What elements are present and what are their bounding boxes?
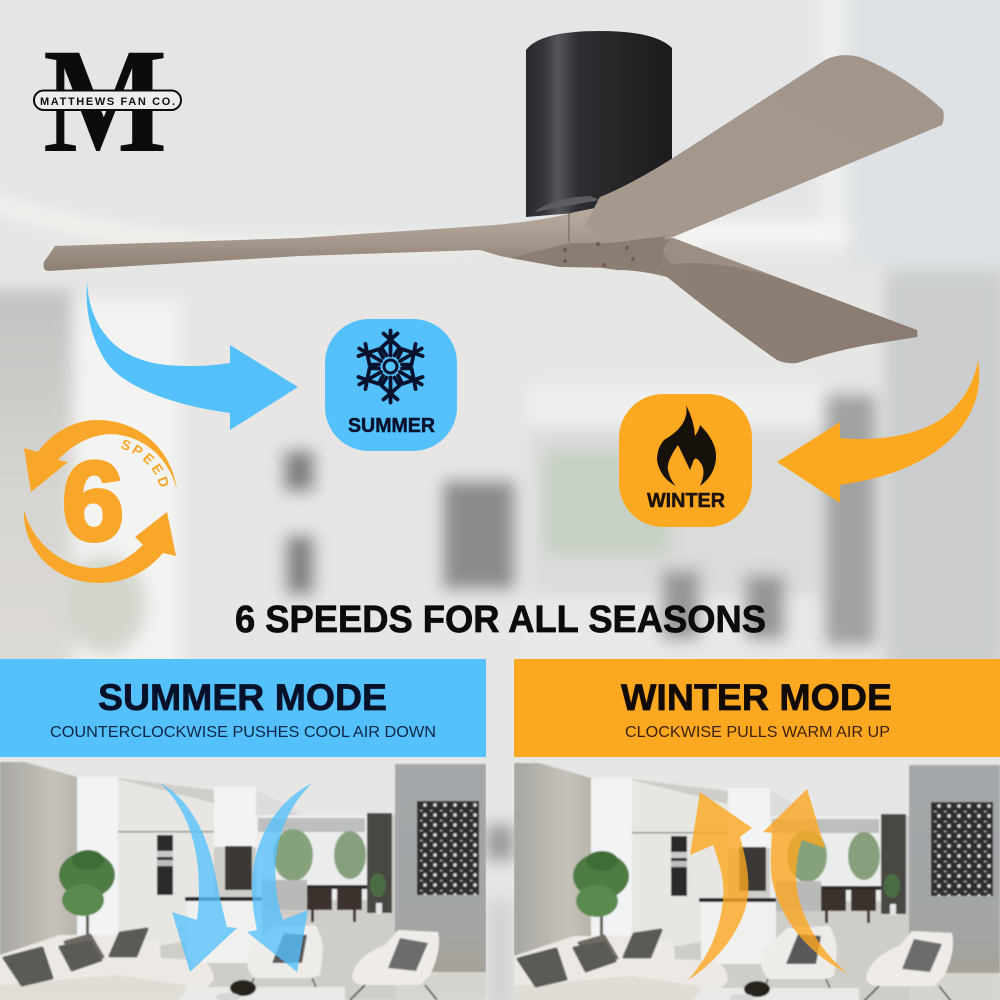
6 speed icon: S	[119, 436, 133, 454]
winter badge	[619, 394, 752, 527]
blade: upper right	[585, 55, 944, 245]
6 speed icon: 6	[62, 439, 124, 564]
6 speed icon	[24, 420, 177, 583]
logo: Matthews Fan Co.: MATTHEWS FAN CO.	[40, 96, 175, 108]
arrow: left cool air	[160, 783, 237, 972]
arrow: right warm air	[763, 789, 847, 973]
photo: winter room with upward airflow	[514, 758, 1000, 1000]
icon: flame	[657, 405, 716, 486]
panel: winter mode: CLOCKWISE PULLS WARM AIR UP	[625, 724, 890, 741]
ceiling fan	[44, 31, 944, 363]
blade: lower right	[560, 238, 918, 363]
motor housing	[526, 31, 672, 217]
panel: summer mode: COUNTERCLOCKWISE PUSHES COOL AIR DOWN	[50, 724, 436, 741]
panel: summer mode	[0, 659, 486, 757]
summer badge	[325, 319, 457, 451]
photo: summer room with downward airflow	[0, 757, 486, 1000]
panel: winter mode	[514, 659, 1000, 757]
panel: winter mode: WINTER MODE	[621, 677, 892, 718]
6 speed icon: E	[149, 461, 167, 477]
6 speed icon: P	[129, 441, 146, 459]
winter badge: WINTER	[647, 490, 726, 512]
blade: long left	[44, 205, 620, 271]
summer badge: SUMMER	[348, 415, 436, 437]
arrow: left warm air	[688, 792, 752, 980]
arrow: winter airflow	[777, 360, 979, 503]
6 speed icon: D	[154, 474, 173, 490]
6 speed icon: E	[140, 450, 158, 468]
hub with screw holes	[510, 212, 665, 268]
panel: summer mode: SUMMER MODE	[98, 677, 387, 718]
logo: Matthews Fan Co.: M	[43, 18, 167, 183]
arrow: right cool air	[247, 783, 312, 972]
heading: 6 SPEEDS FOR ALL SEASONS	[235, 599, 766, 641]
arrow: summer airflow	[87, 280, 298, 430]
icon: snowflake	[355, 330, 426, 402]
lower circular arrow	[24, 510, 176, 583]
upper circular arrow	[24, 420, 177, 492]
